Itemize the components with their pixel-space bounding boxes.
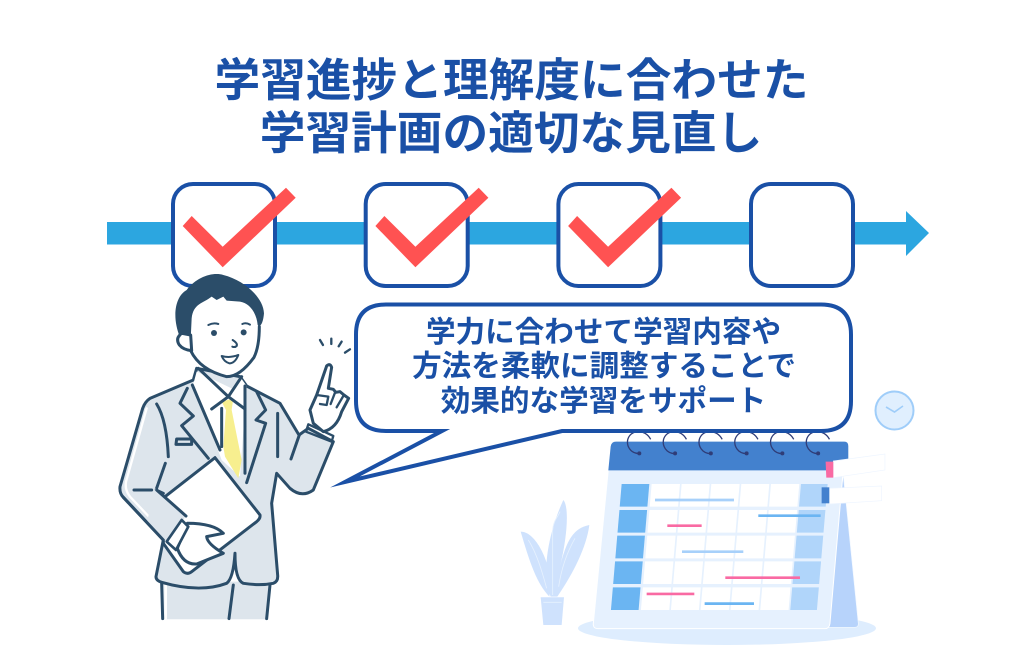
bubble text: 学力に合わせて学習内容や [426,316,781,349]
cuff [167,520,188,550]
man in suit [120,274,350,619]
jacket and raised arm [120,368,333,588]
checkbox 3 checked [558,184,681,286]
sleeve arm over tablet [147,488,186,543]
tie [222,398,242,478]
shirt [193,372,247,477]
hair [175,274,264,339]
trouser highlight [162,585,170,619]
bubble text [412,316,796,418]
binder rings [627,432,829,455]
sleeve highlight [126,408,160,528]
fingers and cuff [306,393,343,442]
sparkle marks [320,339,350,353]
title [215,55,808,159]
bubble text: 方法を柔軟に調整することで [412,350,796,383]
eyes [211,329,247,336]
lower hand [177,523,223,564]
bubble text: 効果的な学習をサポート [441,385,766,418]
checkbox 2 checked [366,184,488,286]
ground shadow [578,612,876,645]
neck and face [192,293,261,377]
ear [178,333,192,351]
arrow: timeline [107,211,929,256]
calendar page [593,469,843,629]
speech bubble [345,304,851,482]
checklist: progress steps [173,184,853,286]
trouser lines [162,583,270,619]
calendar grid [611,484,828,610]
checkbox 4 empty [751,184,853,286]
title: 学習進捗と理解度に合わせた [215,55,808,106]
face features [208,323,250,363]
schedule bars [647,500,821,604]
raised hand [310,365,349,432]
icon: potted plant [521,500,589,625]
calendar stand [820,475,858,627]
sticky tabs [822,454,885,504]
calendar header [608,442,848,470]
calendar illustration [521,432,885,645]
trousers [162,582,270,619]
jaw line [191,327,259,377]
checkbox 1 checked [173,184,296,286]
icon: clock [876,392,914,430]
sleeve edge [123,490,186,540]
jacket lapels and collar [134,368,299,493]
title: 学習計画の適切な見直し [260,108,762,159]
tablet [163,458,260,573]
